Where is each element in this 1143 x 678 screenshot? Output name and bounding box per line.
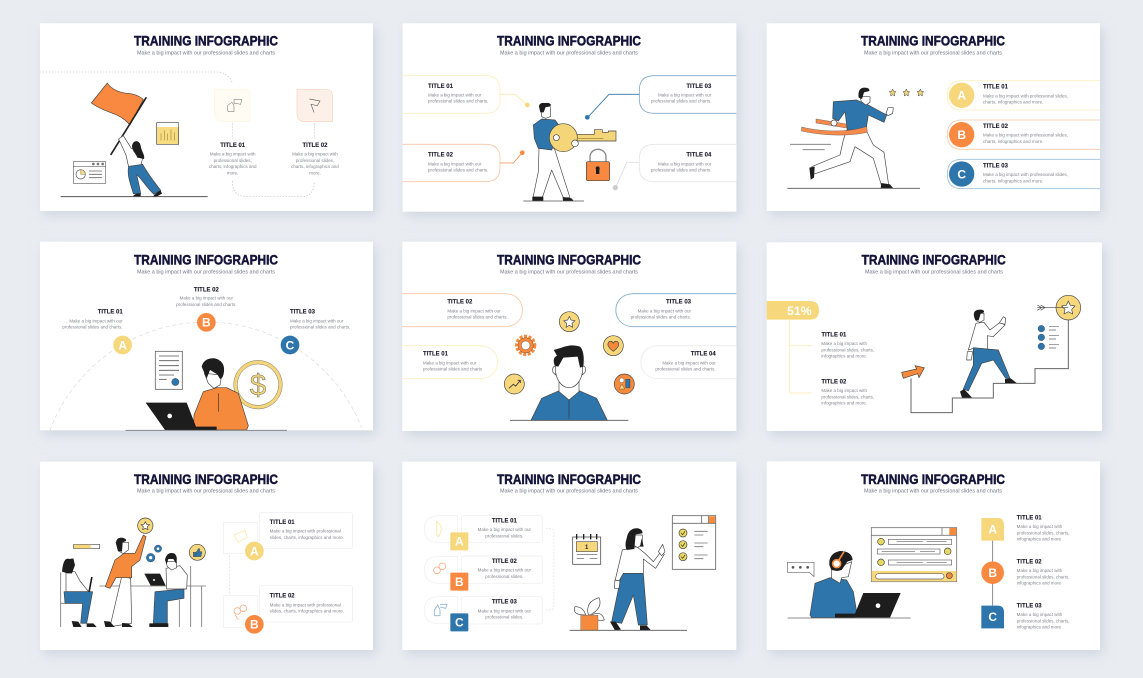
icon: star bbox=[559, 312, 579, 332]
card B: Make a big impact with professional bbox=[270, 602, 341, 607]
panel: slide 8 woman checklist bbox=[402, 462, 736, 650]
text block: title 02: Make a big impact with bbox=[292, 152, 338, 157]
row A: professional slides. bbox=[485, 533, 523, 538]
callout: title 03: Make a big impact with our bbox=[638, 308, 691, 313]
text block: title 01: more. bbox=[227, 170, 238, 175]
text block: title 02: charts, infographics and bbox=[291, 164, 339, 169]
connector line bbox=[991, 541, 994, 606]
card A: slides, charts, infographics and more. bbox=[270, 535, 344, 540]
icon: calendar bbox=[573, 534, 601, 564]
row C: C bbox=[957, 167, 966, 181]
panel: slide 5 head and icons bbox=[402, 242, 736, 431]
marker B with text: Make a big impact with our bbox=[180, 296, 234, 301]
marker B with text: TITLE 02 bbox=[194, 287, 219, 293]
icon: heart bbox=[603, 336, 623, 356]
icon: target star bbox=[1037, 295, 1081, 320]
icon: blue gears bbox=[146, 545, 162, 562]
subtitle: Make a big impact with our professional slides and charts bbox=[137, 51, 275, 57]
text block: title 02 bbox=[821, 379, 874, 406]
callout: title 02: TITLE 02 bbox=[447, 300, 473, 306]
connector dashes bbox=[229, 555, 231, 595]
panel: slide 7 team bbox=[40, 462, 373, 650]
text block: title 02: Make a big impact with bbox=[821, 388, 867, 393]
illustration: runner crossing ribbon bbox=[787, 88, 920, 188]
marker C with text: TITLE 03 bbox=[290, 310, 316, 316]
stairs line bbox=[911, 320, 1068, 413]
callout: title 02 bbox=[402, 294, 522, 327]
text block: title 02: professional slides, charts, bbox=[821, 394, 874, 399]
title: TRAINING INFOGRAPHIC bbox=[861, 34, 1005, 49]
row A bbox=[947, 81, 1100, 110]
text block: title 01: infographics and more. bbox=[821, 354, 867, 359]
row B: B bbox=[957, 128, 966, 142]
row B: B bbox=[455, 575, 464, 589]
text block: title 02: professional slides, bbox=[296, 158, 334, 163]
illustration: woman pointing bbox=[570, 528, 687, 630]
callout: title 01 bbox=[403, 76, 530, 113]
text block: title 02: TITLE 02 bbox=[821, 379, 847, 385]
row C: Make a big impact with professional slides, bbox=[983, 172, 1068, 177]
text block: title 02: Make a big impact with bbox=[1017, 568, 1063, 573]
illustration: man climbing bbox=[960, 310, 1017, 398]
text block: title 01: Make a big impact with bbox=[1017, 524, 1063, 529]
marker A with text bbox=[62, 310, 132, 354]
panel: slide 6 stairs bbox=[767, 242, 1102, 431]
text block: title 01 bbox=[1017, 515, 1070, 542]
marker A with text: TITLE 01 bbox=[98, 310, 123, 316]
card B: B bbox=[250, 618, 259, 632]
marker B bbox=[981, 561, 1004, 584]
marker A bbox=[981, 518, 1004, 541]
callout: title 03: professional slides and charts. bbox=[631, 314, 691, 319]
callout: title 04 bbox=[613, 144, 736, 190]
panel: slide 2 key bbox=[403, 23, 736, 212]
row C bbox=[947, 159, 1100, 189]
stat: 51 percent: 51% bbox=[787, 304, 812, 318]
card A bbox=[223, 512, 353, 561]
card B: TITLE 02 bbox=[270, 594, 295, 600]
callout: title 03: TITLE 03 bbox=[666, 300, 692, 306]
row B: professional slides. bbox=[485, 574, 523, 579]
text block: title 01: professional slides, charts, bbox=[821, 347, 874, 352]
arrow bbox=[902, 366, 924, 378]
illustration: team at table bbox=[61, 535, 206, 627]
callout: title 04: professional slides and charts. bbox=[655, 366, 716, 371]
subtitle: Make a big impact with our professional slides and charts bbox=[865, 270, 1003, 276]
panel: slide 3 finish line bbox=[767, 23, 1100, 211]
callout: title 02: Make a big impact with our bbox=[428, 161, 482, 166]
text block: title 01: professional slides, bbox=[214, 158, 252, 163]
chat window bbox=[871, 528, 957, 582]
text block: title 02 bbox=[291, 143, 339, 175]
row B: charts, infographics and more. bbox=[983, 139, 1043, 144]
callout: title 02: Make a big impact with our bbox=[447, 308, 501, 313]
row C: TITLE 03 bbox=[492, 600, 517, 606]
marker A with text: A bbox=[118, 338, 127, 352]
text block: title 02: TITLE 02 bbox=[303, 143, 328, 149]
checklist bbox=[1038, 325, 1059, 350]
text block: title 03 bbox=[1017, 603, 1070, 629]
row A: A bbox=[957, 89, 966, 103]
marker C: C bbox=[988, 610, 997, 624]
marker A with text: Make a big impact with our bbox=[69, 318, 123, 323]
text block: title 01: professional slides, charts, bbox=[1017, 530, 1070, 535]
row B bbox=[947, 120, 1100, 149]
callout: title 02: professional slides and charts. bbox=[428, 167, 488, 172]
marker B: B bbox=[988, 566, 997, 580]
panel: slide 9 headset bbox=[767, 461, 1100, 650]
row C bbox=[424, 597, 543, 631]
callout: title 03: TITLE 03 bbox=[686, 84, 712, 90]
row A: Make a big impact with our bbox=[478, 527, 532, 532]
icon: bar chart window bbox=[157, 123, 179, 144]
panel: slide 4 arc bbox=[40, 242, 373, 430]
title: TRAINING INFOGRAPHIC bbox=[862, 252, 1006, 267]
dashed arc bbox=[50, 322, 362, 430]
title: TRAINING INFOGRAPHIC bbox=[134, 252, 278, 267]
title: TRAINING INFOGRAPHIC bbox=[497, 472, 641, 487]
row C: charts, infographics and more. bbox=[983, 178, 1043, 183]
text block: title 01: charts, infographics and bbox=[209, 164, 257, 169]
subtitle: Make a big impact with our professional slides and charts bbox=[500, 51, 638, 57]
icon: dollar coin: $ bbox=[250, 369, 266, 402]
row A: Make a big impact with professional slides, bbox=[983, 93, 1068, 98]
callout: title 01: Make a big impact with our bbox=[428, 93, 482, 98]
marker A with text: professional slides and charts. bbox=[62, 325, 123, 330]
dashed bracket bbox=[546, 528, 554, 610]
icon card 1 bbox=[214, 89, 250, 122]
callout: title 01: professional slides and charts. bbox=[428, 99, 488, 104]
illustration: person with headset bbox=[788, 551, 911, 618]
text block: title 02: TITLE 02 bbox=[1017, 559, 1042, 565]
icon: plant bbox=[574, 598, 604, 630]
icon: dollar coin bbox=[234, 360, 282, 409]
card A: A bbox=[250, 544, 259, 558]
icon: pie chart window bbox=[73, 162, 106, 183]
marker A: A bbox=[988, 523, 997, 537]
row A: charts, infographics and more. bbox=[983, 100, 1043, 105]
text block: title 01: TITLE 01 bbox=[1017, 515, 1042, 521]
icon: calendar: 1 bbox=[585, 545, 589, 551]
title: TRAINING INFOGRAPHIC bbox=[134, 472, 278, 487]
callout: title 01: TITLE 01 bbox=[428, 84, 454, 90]
callout: title 04: TITLE 04 bbox=[691, 352, 716, 358]
callout: title 04: Make a big impact with our bbox=[662, 360, 716, 365]
row A: TITLE 01 bbox=[983, 85, 1009, 91]
text block: title 01: infographics and more bbox=[1017, 537, 1062, 542]
illustration: woman raising flag bbox=[61, 83, 208, 197]
row A: TITLE 01 bbox=[492, 518, 517, 524]
card A: Make a big impact with professional bbox=[270, 529, 341, 534]
row A bbox=[424, 515, 543, 550]
row B: TITLE 02 bbox=[983, 124, 1009, 130]
text block: title 01 bbox=[209, 143, 257, 175]
progress bar bbox=[74, 544, 100, 549]
subtitle: Make a big impact with our professional slides and charts bbox=[137, 269, 275, 275]
icon: star badge bbox=[138, 518, 153, 533]
subtitle: Make a big impact with our professional slides and charts bbox=[864, 489, 1002, 495]
text block: title 02: infographics and more bbox=[1017, 581, 1062, 586]
callout: title 03 bbox=[616, 294, 736, 327]
row B: TITLE 02 bbox=[492, 559, 517, 565]
subtitle: Make a big impact with our professional slides and charts bbox=[864, 51, 1002, 57]
icon: checklist window bbox=[672, 516, 716, 569]
marker C with text: Make a big impact with our bbox=[290, 318, 344, 323]
callout: title 03 bbox=[585, 76, 736, 120]
callout: title 04: TITLE 04 bbox=[686, 153, 712, 159]
subtitle: Make a big impact with our professional slides and charts bbox=[500, 270, 638, 276]
text block: title 01 bbox=[821, 332, 874, 359]
row C: TITLE 03 bbox=[983, 163, 1009, 169]
callout: title 03: Make a big impact with our bbox=[658, 93, 712, 98]
icon: shapes bbox=[614, 374, 634, 394]
text block: title 01: Make a big impact with bbox=[821, 341, 867, 346]
text block: title 01: TITLE 01 bbox=[821, 332, 847, 338]
row C: professional slides. bbox=[485, 615, 523, 620]
marker C with text: C bbox=[286, 338, 295, 352]
icon: trend chart bbox=[504, 374, 524, 394]
icon card 2 bbox=[297, 89, 333, 122]
card A: TITLE 01 bbox=[270, 520, 295, 526]
illustration: man portrait bbox=[510, 345, 628, 420]
callout: title 02 bbox=[403, 144, 525, 182]
text block: title 01: TITLE 01 bbox=[220, 143, 246, 149]
card B: slides, charts, infographics and more. bbox=[270, 609, 344, 614]
callout: title 04: Make a big impact with our bbox=[658, 161, 712, 166]
text block: title 03: Make a big impact with bbox=[1017, 612, 1063, 617]
icon: thumbs up bbox=[189, 544, 205, 560]
callout: title 01 bbox=[402, 346, 497, 379]
text block: title 02: infographics and more. bbox=[821, 401, 867, 406]
callout: title 02: professional slides and charts. bbox=[447, 314, 508, 319]
icon: gear bbox=[518, 337, 534, 353]
callout: title 01: Make a big impact with our bbox=[423, 360, 477, 365]
title: TRAINING INFOGRAPHIC bbox=[861, 472, 1005, 487]
row B: Make a big impact with professional slides, bbox=[983, 133, 1068, 138]
dotted path top bbox=[40, 72, 232, 83]
illustration: person at laptop bbox=[126, 358, 287, 430]
title: TRAINING INFOGRAPHIC bbox=[497, 34, 641, 49]
text block: title 02: professional slides, charts, bbox=[1017, 574, 1070, 579]
text block: title 02: more. bbox=[309, 170, 321, 175]
icon: padlock bbox=[586, 149, 610, 181]
illustration: man holding key bbox=[523, 103, 616, 201]
marker B with text: professional slides and charts. bbox=[176, 302, 236, 307]
marker B with text: B bbox=[202, 316, 211, 330]
title: TRAINING INFOGRAPHIC bbox=[134, 34, 278, 49]
callout: title 02: TITLE 02 bbox=[428, 153, 454, 159]
row C: C bbox=[455, 616, 464, 630]
tree lines bbox=[789, 320, 812, 393]
speech bubble bbox=[787, 562, 814, 577]
icon: three stars bbox=[889, 89, 924, 96]
stat: 51 percent bbox=[767, 301, 819, 320]
text block: title 03: TITLE 03 bbox=[1017, 603, 1042, 609]
row C: Make a big impact with our bbox=[478, 608, 532, 613]
callout: title 01: TITLE 01 bbox=[423, 352, 449, 358]
marker C bbox=[981, 606, 1004, 628]
dashed connectors bbox=[232, 123, 314, 197]
callout: title 03: professional slides and charts. bbox=[651, 99, 711, 104]
text block: title 03: professional slides, charts, bbox=[1017, 618, 1070, 623]
row B bbox=[424, 556, 543, 591]
card B bbox=[223, 586, 353, 635]
marker C with text: professional slides and charts. bbox=[290, 325, 350, 330]
callout: title 01: professional slides and charts bbox=[423, 366, 483, 371]
callout: title 04 bbox=[641, 346, 736, 379]
marker B with text bbox=[176, 287, 236, 332]
text block: title 03: infographics and more bbox=[1017, 624, 1062, 629]
icon: document bbox=[155, 351, 182, 389]
text block: title 01: Make a big impact with bbox=[210, 152, 256, 157]
subtitle: Make a big impact with our professional slides and charts bbox=[500, 489, 638, 495]
text block: title 02 bbox=[1017, 559, 1070, 586]
panel: slide 1 flag bbox=[40, 23, 373, 211]
marker C with text bbox=[281, 310, 350, 354]
title: TRAINING INFOGRAPHIC bbox=[497, 252, 641, 267]
subtitle: Make a big impact with our professional slides and charts bbox=[137, 489, 275, 495]
row B: Make a big impact with our bbox=[478, 568, 532, 573]
row A: A bbox=[455, 535, 464, 549]
callout: title 04: professional slides and charts. bbox=[651, 167, 711, 172]
